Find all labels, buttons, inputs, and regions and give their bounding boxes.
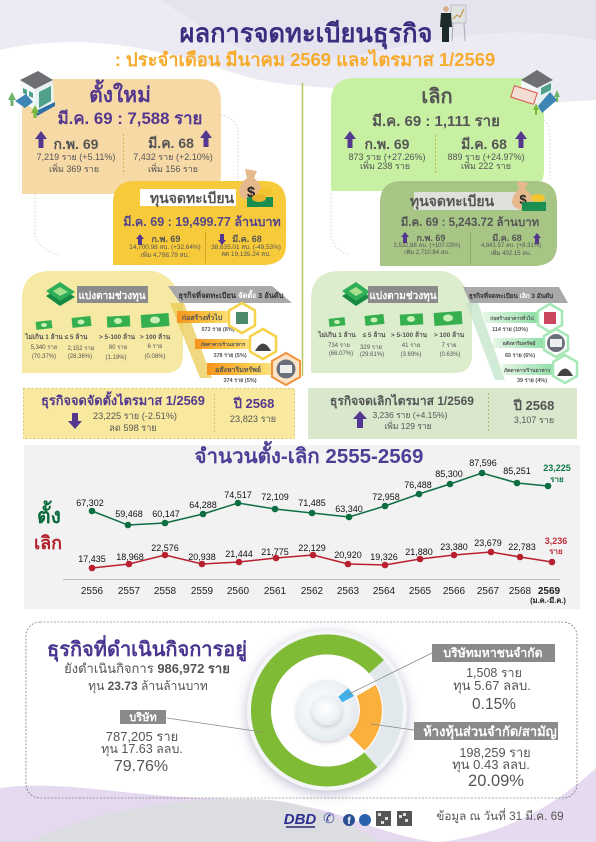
rank 3 xyxy=(502,355,577,384)
compare March 68: มี.ค. 68 xyxy=(148,135,194,151)
quarter heading: ธุรกิจจดจัดตั้งไตรมาส 1/2569 xyxy=(41,391,205,409)
x axis years xyxy=(81,586,566,605)
series: closed xyxy=(78,536,567,571)
band labels: ไม่เกิน 1 ล้าน xyxy=(24,332,63,341)
band labels: > 100 ล้าน xyxy=(140,332,171,341)
band values: 6 ราย xyxy=(147,343,163,350)
rank 2: ภัตตาคาร/ร้านอาหาร xyxy=(201,341,246,348)
compare March 68: 889 ราย (+24.97%) xyxy=(448,152,524,162)
legend: closed: เลิก xyxy=(34,533,62,553)
series: closed: 19,326 xyxy=(370,552,398,562)
band values: (3.69%) xyxy=(400,352,422,358)
previous year xyxy=(513,398,554,425)
donut chart xyxy=(247,630,407,790)
icon: money stack xyxy=(46,282,75,306)
closed March total: มี.ค. 69 : 1,111 ราย xyxy=(372,113,500,130)
DBD logo: DBD xyxy=(284,811,316,828)
new March total: มี.ค. 69 : 7,588 ราย xyxy=(58,109,202,128)
company callout: 787,205 ราย xyxy=(106,729,178,744)
partnership callout xyxy=(414,722,558,790)
series: closed: 20,920 xyxy=(334,550,362,560)
x axis years: 2569 xyxy=(538,586,561,597)
series: new: 74,517 xyxy=(224,490,252,500)
x axis years: 2563 xyxy=(337,586,360,597)
panel: quarter closed xyxy=(308,388,577,439)
x axis years: 2565 xyxy=(409,586,432,597)
rank 2 xyxy=(195,329,276,359)
series: new: 85,300 xyxy=(435,469,463,479)
capital compare February xyxy=(129,234,201,259)
footer icons xyxy=(284,810,412,828)
arrow up xyxy=(344,131,356,148)
previous year: 23,823 ราย xyxy=(230,414,276,424)
series: closed: 21,880 xyxy=(405,547,433,557)
band labels: > 100 ล้าน xyxy=(434,330,465,339)
arrow down xyxy=(68,413,82,429)
band values: 2,152 ราย xyxy=(68,345,94,352)
series: new: 87,596 xyxy=(469,458,497,468)
band values: (66.07%) xyxy=(329,351,353,357)
capital compare March 68 xyxy=(211,234,281,258)
rank 1: 573 ราย (8%) xyxy=(201,326,235,333)
partnership callout: ทุน 0.43 ลลบ. xyxy=(452,757,530,773)
band heading: แบ่งตามช่วงทุน xyxy=(78,290,146,302)
compare February xyxy=(349,136,425,171)
quarter heading: ธุรกิจจดเลิกไตรมาส 1/2569 xyxy=(330,393,474,409)
arrow up xyxy=(533,233,541,244)
rank 3: ภัตตาคาร/ร้านอาหาร xyxy=(504,367,550,374)
series: closed: 18,968 xyxy=(116,552,144,562)
x axis years: 2557 xyxy=(118,586,141,597)
partnership callout: 20.09% xyxy=(468,772,524,790)
active heading: ธุรกิจที่ดำเนินกิจการอยู่ xyxy=(47,634,247,663)
x axis years: 2560 xyxy=(227,586,250,597)
public company callout xyxy=(432,644,555,713)
x axis years: 2566 xyxy=(443,586,466,597)
capital compare March 68: มี.ค. 68 xyxy=(232,234,262,244)
rank 2: 378 ราย (5%) xyxy=(213,352,247,359)
icon: office building xyxy=(8,71,55,118)
capital compare February: ก.พ. 69 xyxy=(152,234,180,244)
band values: (1.19%) xyxy=(105,355,127,361)
compare February: เพิ่ม 238 ราย xyxy=(360,159,410,171)
x axis years: 2562 xyxy=(301,586,324,597)
series: closed: 21,444 xyxy=(225,549,253,559)
panel: capital closed xyxy=(380,181,557,266)
capital compare February: เพิ่ม 4,798.79 ลบ. xyxy=(141,250,190,259)
rank 2: อสังหาริมทรัพย์ xyxy=(503,340,535,347)
capital compare February xyxy=(393,233,461,256)
series: new: 71,485 xyxy=(298,498,326,508)
x axis years: 2559 xyxy=(191,586,214,597)
panel: quarter new xyxy=(24,388,294,438)
compare February: เพิ่ม 369 ราย xyxy=(49,162,99,174)
heading: new: ตั้งใหม่ xyxy=(89,79,151,107)
x axis years: 2561 xyxy=(264,586,287,597)
compare February: 873 ราย (+27.26%) xyxy=(349,152,425,162)
icon: banknotes xyxy=(329,311,462,327)
top 3 heading: ธุรกิจที่จดทะเบียน จัดตั้ง 3 อันดับ xyxy=(178,289,284,300)
capital compare March 68 xyxy=(481,233,541,257)
previous year: ปี 2568 xyxy=(513,398,554,413)
panel: top 3 closed xyxy=(463,287,577,384)
band labels: ≤ 5 ล้าน xyxy=(363,330,386,339)
band values xyxy=(31,343,166,361)
line chart xyxy=(24,440,580,609)
band heading: แบ่งตามช่วงทุน xyxy=(369,290,437,302)
capital compare March 68: มี.ค. 68 xyxy=(492,233,522,243)
series: closed: 22,129 xyxy=(298,543,326,553)
icon: banknotes xyxy=(36,313,169,330)
icon: money bag: $ xyxy=(247,184,256,201)
public company callout: 1,508 ราย xyxy=(466,666,522,680)
partnership callout: 198,259 ราย xyxy=(459,745,531,760)
band labels: > 5-100 ล้าน xyxy=(391,330,428,339)
panel: closures xyxy=(331,78,544,191)
capital compare February: ก.พ. 69 xyxy=(417,233,445,243)
rank 3 xyxy=(207,353,300,385)
rank 1: ก่อสร้างทั่วไป xyxy=(182,312,223,322)
public company callout: ทุน 5.67 ลลบ. xyxy=(453,678,531,694)
icon: phone: ✆ xyxy=(323,810,335,826)
active totals: ทุน 23.73 ล้านล้านบาท xyxy=(88,679,208,694)
company callout: บริษัท xyxy=(129,711,157,724)
subtitle: : ประจำเดือน มีนาคม 2569 และไตรมาส 1/2569 xyxy=(115,49,495,70)
series: new: 23,225 xyxy=(543,463,571,473)
icon: facebook: f xyxy=(347,816,351,827)
band labels xyxy=(317,330,465,339)
series: new: 72,958 xyxy=(372,492,400,502)
series: new: 63,340 xyxy=(335,504,363,514)
icon: presenter with chart xyxy=(440,5,466,42)
band values: (0.63%) xyxy=(439,352,461,358)
leader lines xyxy=(167,653,432,732)
title: ผลการจดทะเบียนธุรกิจ xyxy=(180,19,432,50)
heading: closed: เลิก xyxy=(421,86,453,108)
compare February: 7,219 ราย (+5.11%) xyxy=(37,152,115,162)
x axis years: 2556 xyxy=(81,586,104,597)
series: closed: 17,435 xyxy=(78,554,106,564)
center divider xyxy=(302,83,304,376)
quarter values xyxy=(372,410,448,431)
compare March 68: เพิ่ม 222 ราย xyxy=(461,159,511,171)
series: new: 76,488 xyxy=(404,480,432,490)
series: closed: 21,775 xyxy=(261,547,289,557)
band values: 329 ราย xyxy=(360,344,382,351)
rank 3: อสังหาริมทรัพย์ xyxy=(215,365,261,374)
capital total: มี.ค. 69 : 5,243.72 ล้านบาท xyxy=(401,216,540,229)
rank 3: 374 ราย (5%) xyxy=(223,377,257,384)
band values: (29.61%) xyxy=(360,352,384,358)
rank 1 xyxy=(483,304,562,333)
legend: new: ตั้ง xyxy=(37,500,61,528)
panel: top 3 new xyxy=(168,286,300,385)
rank 1: 114 ราย (10%) xyxy=(492,326,528,333)
band labels: > 5-100 ล้าน xyxy=(99,332,136,341)
series: new: 64,288 xyxy=(189,500,217,510)
quarter values: ลด 598 ราย xyxy=(109,423,157,433)
compare February xyxy=(37,136,115,174)
series: new: 72,109 xyxy=(261,492,289,502)
x axis years: (ม.ค.-มี.ค.) xyxy=(530,596,566,605)
public company callout: 0.15% xyxy=(472,696,516,713)
company callout xyxy=(101,710,183,775)
series: new: 60,147 xyxy=(152,509,180,519)
compare March 68 xyxy=(133,135,213,174)
panel: capital new xyxy=(113,181,286,265)
series: new: 59,468 xyxy=(115,509,143,519)
icon: twitter xyxy=(359,814,371,826)
compare March 68: เพิ่ม 156 ราย xyxy=(148,162,198,174)
band labels: ไม่เกิน 1 ล้าน xyxy=(317,330,356,339)
public company callout: บริษัทมหาชนจำกัด xyxy=(443,646,543,660)
band values: (70.37%) xyxy=(32,354,56,360)
series: closed: ราย xyxy=(549,547,563,556)
previous year: ปี 2568 xyxy=(233,396,274,411)
series: new xyxy=(76,458,571,528)
series: new: 85,251 xyxy=(503,466,531,476)
active totals xyxy=(64,661,230,694)
icon: money bag xyxy=(239,169,273,207)
compare February: ก.พ. 69 xyxy=(365,136,410,152)
band values: 7 ราย xyxy=(441,342,457,349)
data date note: ข้อมูล ณ วันที่ 31 มี.ค. 69 xyxy=(436,808,564,824)
x axis years: 2567 xyxy=(477,586,500,597)
arrow up xyxy=(136,234,144,245)
icon: money bag xyxy=(512,181,546,211)
capital compare March 68: เพิ่ม 402.15 ลบ. xyxy=(491,249,532,257)
series: closed: 23,380 xyxy=(440,542,468,552)
company callout: 79.76% xyxy=(114,758,168,775)
partnership callout: ห้างหุ้นส่วนจำกัด/สามัญ xyxy=(423,724,557,740)
arrow up xyxy=(200,130,212,147)
series: new: 67,302 xyxy=(76,498,104,508)
panel: capital bands new xyxy=(22,271,183,373)
series: closed: 22,576 xyxy=(151,543,179,553)
capital compare March 68: 4,841.57 ลบ. (+8.31%) xyxy=(481,243,541,249)
connectors xyxy=(35,115,550,255)
band values: (28.36%) xyxy=(68,354,92,360)
band values: 41 ราย xyxy=(402,342,420,349)
x axis years: 2558 xyxy=(154,586,177,597)
band values xyxy=(328,342,461,358)
compare March 68: มี.ค. 68 xyxy=(461,136,507,152)
series: closed: 23,679 xyxy=(474,538,502,548)
arrow up xyxy=(515,131,527,148)
capital compare March 68: ลด 19,135.24 ลบ. xyxy=(221,251,271,258)
quarter values xyxy=(93,411,177,433)
band values: 5,340 ราย xyxy=(31,344,57,351)
capital heading: ทุนจดทะเบียน xyxy=(410,193,495,210)
icon: closed building xyxy=(511,70,560,115)
capital compare February: เพิ่ม 2,710.84 ลบ. xyxy=(404,248,450,256)
capital compare February: 2,532.88 ลบ. (+107.03%) xyxy=(393,243,461,249)
x axis years: 2568 xyxy=(509,586,532,597)
active totals: ยังดำเนินกิจการ 986,972 ราย xyxy=(64,661,230,676)
band values: 90 ราย xyxy=(109,344,127,351)
band values: (0.08%) xyxy=(144,354,166,360)
series: closed: 22,783 xyxy=(508,542,536,552)
panel: capital bands closed xyxy=(311,271,472,373)
previous year xyxy=(230,396,276,424)
icon: money bag: $ xyxy=(519,192,527,207)
capital total: มี.ค. 69 : 19,499.77 ล้านบาท xyxy=(123,215,281,229)
previous year: 3,107 ราย xyxy=(514,415,554,425)
band labels xyxy=(24,332,171,341)
panel: new registrations xyxy=(22,79,221,194)
capital compare February: 14,700.98 ลบ. (+32.64%) xyxy=(129,244,201,251)
compare March 68: 7,432 ราย (+2.10%) xyxy=(133,152,213,162)
arrow up xyxy=(401,232,409,243)
arrow down xyxy=(218,234,226,245)
rank 2: 65 ราย (6%) xyxy=(505,352,535,359)
x axis years: 2564 xyxy=(373,586,396,597)
series: closed: 20,938 xyxy=(188,552,216,562)
quarter values: 23,225 ราย (-2.51%) xyxy=(93,411,177,421)
series: closed: 3,236 xyxy=(545,536,567,546)
company callout: ทุน 17.63 ลลบ. xyxy=(101,742,183,757)
rank 3: 39 ราย (4%) xyxy=(517,377,547,384)
rank 1: ก่อสร้างอาคารทั่วไป xyxy=(490,314,534,322)
rank 1 xyxy=(177,303,255,333)
panel: active businesses xyxy=(26,622,577,798)
rank 2 xyxy=(493,329,568,359)
icon: QR codes xyxy=(376,811,412,826)
compare February: ก.พ. 69 xyxy=(54,136,99,152)
compare March 68 xyxy=(448,136,524,171)
quarter values: เพิ่ม 129 ราย xyxy=(384,420,432,431)
icon: money stack xyxy=(342,282,370,306)
chart title: จำนวนตั้ง-เลิก 2555-2569 xyxy=(195,440,423,468)
arrow up xyxy=(353,411,367,428)
capital compare March 68: 38,635.01 ลบ. (-49.53%) xyxy=(211,244,281,251)
band values: 734 ราย xyxy=(328,342,350,349)
series: new: ราย xyxy=(550,475,564,484)
arrow up xyxy=(35,131,47,148)
band labels: ≤ 5 ล้าน xyxy=(65,332,88,341)
quarter values: 3,236 ราย (+4.15%) xyxy=(372,410,448,420)
top 3 heading: ธุรกิจที่จดทะเบียน เลิก 3 อันดับ xyxy=(469,290,553,300)
capital heading: ทุนจดทะเบียน xyxy=(150,190,235,207)
